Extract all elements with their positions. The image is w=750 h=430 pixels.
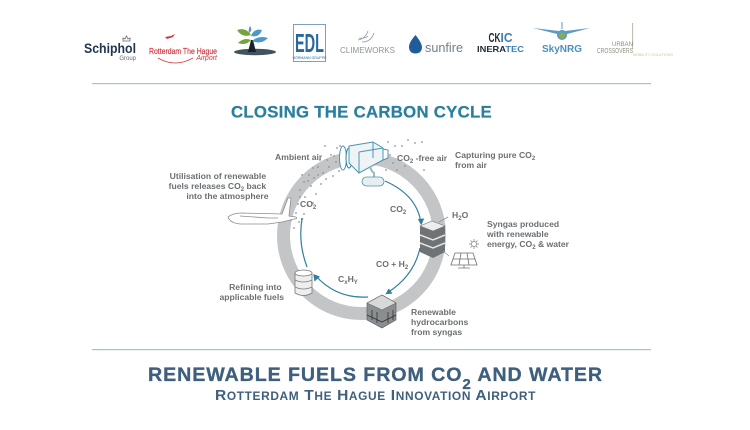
label: CO2 in ring: 2 xyxy=(313,205,317,211)
label: CO2 on arrow: CO xyxy=(390,204,403,214)
icon: hydrocarbon cube xyxy=(367,295,396,328)
text: Syngas produced: Syngas produced xyxy=(487,219,559,229)
logo: tree xyxy=(234,26,276,55)
logo: Urban Crossovers xyxy=(597,23,673,57)
icon: CO2 capture device xyxy=(340,142,388,173)
text: Capturing pure CO2: from air xyxy=(455,160,488,170)
logo: EDL xyxy=(293,24,327,62)
label: CxHy: x xyxy=(344,280,348,286)
label: CO2 in ring: CO xyxy=(300,199,313,209)
logo: EDL: EDL xyxy=(295,28,324,58)
grey ring xyxy=(284,158,440,314)
label: CO2-free air: 2 xyxy=(410,159,414,165)
text: Refining into applicable fuels: applicable fuels xyxy=(220,292,284,302)
logo: Rotterdam The Hague Airport: Rotterdam The Hague xyxy=(149,46,217,56)
label: CO2 on arrow: 2 xyxy=(403,210,407,216)
logo: sunfire: sunfire xyxy=(425,41,463,55)
title: Renewable fuels from CO2 and water: RENEWABLE FUELS FROM CO xyxy=(148,364,460,386)
top divider xyxy=(92,83,651,84)
label: CO2-free air: -free air xyxy=(413,153,448,163)
label: H2O: H xyxy=(452,210,458,220)
logo: Ineratec: INERA TEC xyxy=(477,44,524,54)
logo: Ineratec: IC xyxy=(500,30,513,45)
text: Utilisation of renewable fuels: back xyxy=(244,181,266,191)
text: Syngas produced: & water xyxy=(536,239,570,249)
text: Syngas produced: 2 xyxy=(532,245,536,251)
label: H2O: 2 xyxy=(458,216,462,222)
label: CxHy: C xyxy=(338,274,344,284)
subtitle: Rotterdam The Hague Innovation Airport: ROTTERDAM THE HAGUE INNOVATION AIRPORT xyxy=(215,387,536,404)
logo: SkyNRG: SkyNRG xyxy=(542,43,582,55)
heading: Closing the Carbon Cycle: CLOSING THE CARBON CYCLE xyxy=(231,102,492,122)
logo: sunfire xyxy=(409,35,463,55)
label: CxHy: H xyxy=(348,274,354,284)
text: Capturing pure CO2: Capturing pure CO xyxy=(455,150,536,162)
text: Refining into applicable fuels: Refining into xyxy=(229,282,282,292)
logo: Climeworks: CLIMEWORKS xyxy=(340,45,395,55)
logo row xyxy=(84,22,673,63)
text: Utilisation of renewable fuels: fuels releases CO xyxy=(169,181,266,193)
logo: SkyNRG xyxy=(533,22,590,55)
logo: Schiphol Group: Schiphol xyxy=(84,40,136,56)
icon: fuel barrel xyxy=(295,270,312,296)
icon: syngas reactor stack xyxy=(420,221,445,258)
logo: Rotterdam The Hague Airport xyxy=(149,34,218,63)
label: CO2-free air: CO xyxy=(397,153,410,163)
icon: solar panel xyxy=(443,251,477,268)
label: CO + H2: 2 xyxy=(405,265,409,271)
logo: Urban Crossovers: URBAN xyxy=(612,42,633,48)
logo: Schiphol Group xyxy=(84,36,137,62)
logo: EDL: HÖRMANN GRUPPE xyxy=(293,56,327,60)
carbon cycle diagram xyxy=(228,139,479,328)
label: H2O: O xyxy=(462,210,469,220)
label: CO + H2: CO + H xyxy=(376,259,405,269)
icon: CO2 storage pill xyxy=(362,166,384,186)
text: Syngas produced: with renewable xyxy=(486,229,549,239)
label: Ambient air: Ambient air xyxy=(275,152,323,162)
title: Renewable fuels from CO2 and water: 2 xyxy=(462,376,472,393)
text: Syngas produced: energy, CO xyxy=(487,239,570,251)
icon: sun xyxy=(469,239,479,249)
logo: Urban Crossovers: MOBILITY SOLUTIONS xyxy=(633,52,673,57)
arrows xyxy=(301,181,424,297)
ambient air dots xyxy=(290,139,425,229)
logo: Ineratec: CK xyxy=(488,30,501,45)
logo: Schiphol Group: Group xyxy=(119,56,137,62)
bottom divider xyxy=(92,349,651,350)
text: Renewable hydrocarbons: from syngas xyxy=(411,327,462,337)
logo: Climeworks xyxy=(340,31,395,55)
title: Renewable fuels from CO2 and water: AND WATER xyxy=(472,364,603,386)
text: Renewable hydrocarbons: hydrocarbons xyxy=(411,317,469,327)
text: Capturing pure CO2: 2 xyxy=(532,156,536,162)
logo: Urban Crossovers: CROSSOVERS xyxy=(597,48,633,55)
label: CxHy: Y xyxy=(354,280,358,286)
text: Utilisation of renewable fuels: Utilisation of renewable xyxy=(170,171,266,181)
text: Utilisation of renewable fuels: 2 xyxy=(241,187,245,193)
logo: Rotterdam The Hague Airport: Airport xyxy=(195,55,218,62)
text: Renewable hydrocarbons: Renewable xyxy=(411,307,456,317)
logo: Ineratec xyxy=(477,30,524,54)
icon: airplane xyxy=(228,198,297,224)
text: Utilisation of renewable fuels: into the atmosphere xyxy=(186,191,269,201)
H2O pointer xyxy=(439,217,448,222)
